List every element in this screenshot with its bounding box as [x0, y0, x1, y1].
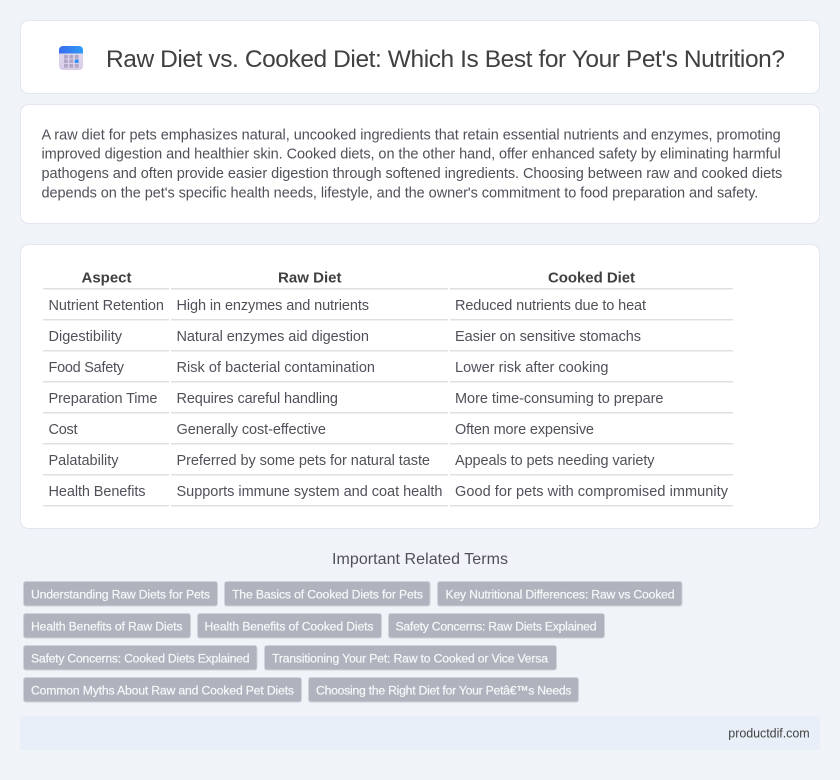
- intro paragraph: pathogens and often provide easier digestion through softened ingredients. Choosing between raw and cooked diets: [42, 166, 782, 182]
- table header row: Cooked Diet: [548, 270, 635, 287]
- row: palatability: Appeals to pets needing variety: [455, 453, 655, 469]
- title: Raw Diet vs. Cooked Diet: Which Is Best for Your Pet's Nutrition?: [106, 46, 785, 73]
- row: health benefits: [43, 484, 733, 506]
- tag: transitioning your pet: [264, 646, 556, 670]
- row: food safety: Risk of bacterial contamination: [176, 360, 375, 376]
- row: palatability: Preferred by some pets for natural taste: [176, 453, 430, 469]
- tag: transitioning your pet: Transitioning Your Pet: Raw to Cooked or Vice Versa: [272, 651, 548, 665]
- tag: common myths: [24, 678, 302, 702]
- row: health benefits: Supports immune system and coat health: [176, 484, 442, 500]
- row: health benefits: Good for pets with compromised immunity: [455, 484, 729, 500]
- row: preparation time: [43, 391, 733, 414]
- row: palatability: [43, 453, 733, 476]
- panel: title header: [20, 20, 820, 94]
- intro paragraph: depends on the pet's specific health needs, lifestyle, and the owner's commitment to food preparation and safety.: [42, 185, 758, 201]
- row: cost: Often more expensive: [455, 422, 594, 438]
- row: cost: Cost: [48, 422, 78, 438]
- tag: safety concerns raw: Safety Concerns: Raw Diets Explained: [396, 619, 596, 633]
- tag: health benefits of raw diets: [24, 614, 190, 638]
- tag: health benefits of cooked diets: [198, 614, 382, 638]
- row: nutrient retention: Reduced nutrients due to heat: [455, 298, 646, 314]
- row: preparation time: More time-consuming to prepare: [455, 391, 664, 407]
- tag: key nutritional differences: [438, 582, 682, 606]
- footer bar: [20, 716, 820, 750]
- intro paragraph: [42, 127, 782, 201]
- row: digestibility: Natural enzymes aid digestion: [176, 329, 369, 345]
- tag: health benefits of raw diets: Health Benefits of Raw Diets: [31, 619, 182, 633]
- row: food safety: Lower risk after cooking: [455, 360, 608, 376]
- intro paragraph: improved digestion and healthier skin. Cooked diets, on the other hand, offer enhanced safety by eliminating harmful: [42, 147, 781, 163]
- row: palatability: Palatability: [48, 453, 119, 469]
- tag: basics of cooked diets: [224, 582, 430, 606]
- tag: understanding raw diets: Understanding Raw Diets for Pets: [31, 587, 210, 601]
- panel: comparison table: [20, 244, 820, 528]
- icon: calendar: [59, 46, 83, 70]
- tag: safety concerns cooked: [24, 646, 257, 670]
- row: nutrient retention: Nutrient Retention: [48, 298, 164, 314]
- row: digestibility: Digestibility: [48, 329, 123, 345]
- row: health benefits: Health Benefits: [48, 484, 146, 500]
- tag: common myths: Common Myths About Raw and Cooked Pet Diets: [31, 683, 294, 697]
- table header row: [43, 270, 733, 290]
- table header row: Raw Diet: [278, 270, 342, 287]
- row: food safety: Food Safety: [48, 360, 125, 376]
- panel: intro text: [20, 104, 820, 224]
- tag: safety concerns cooked: Safety Concerns: Cooked Diets Explained: [31, 651, 250, 665]
- tag: choosing the right diet: Choosing the Right Diet for Your Petâ€™s Needs: [316, 683, 572, 697]
- tag: health benefits of cooked diets: Health Benefits of Cooked Diets: [204, 619, 374, 633]
- related term tags: [24, 582, 682, 702]
- row: nutrient retention: High in enzymes and nutrients: [176, 298, 369, 314]
- row: cost: Generally cost-effective: [176, 422, 326, 438]
- intro paragraph: A raw diet for pets emphasizes natural, uncooked ingredients that retain essential nutrients and enzymes, promoting: [42, 127, 781, 143]
- row: digestibility: [43, 329, 733, 352]
- tag: safety concerns raw: [388, 614, 604, 638]
- row: preparation time: Preparation Time: [48, 391, 158, 407]
- heading: important related terms: Important Related Terms: [332, 551, 508, 568]
- row: nutrient retention: [43, 298, 733, 320]
- tag: basics of cooked diets: The Basics of Cooked Diets for Pets: [232, 587, 423, 601]
- tag: choosing the right diet: [308, 678, 578, 702]
- row: food safety: [43, 360, 733, 382]
- table header row: Aspect: [82, 270, 132, 287]
- row: preparation time: Requires careful handling: [176, 391, 338, 407]
- footer source text: productdif.com: [728, 726, 810, 740]
- row: digestibility: Easier on sensitive stomachs: [455, 329, 641, 345]
- tag: understanding raw diets: [24, 582, 218, 606]
- tag: key nutritional differences: Key Nutritional Differences: Raw vs Cooked: [446, 587, 674, 601]
- row: cost: [43, 422, 733, 444]
